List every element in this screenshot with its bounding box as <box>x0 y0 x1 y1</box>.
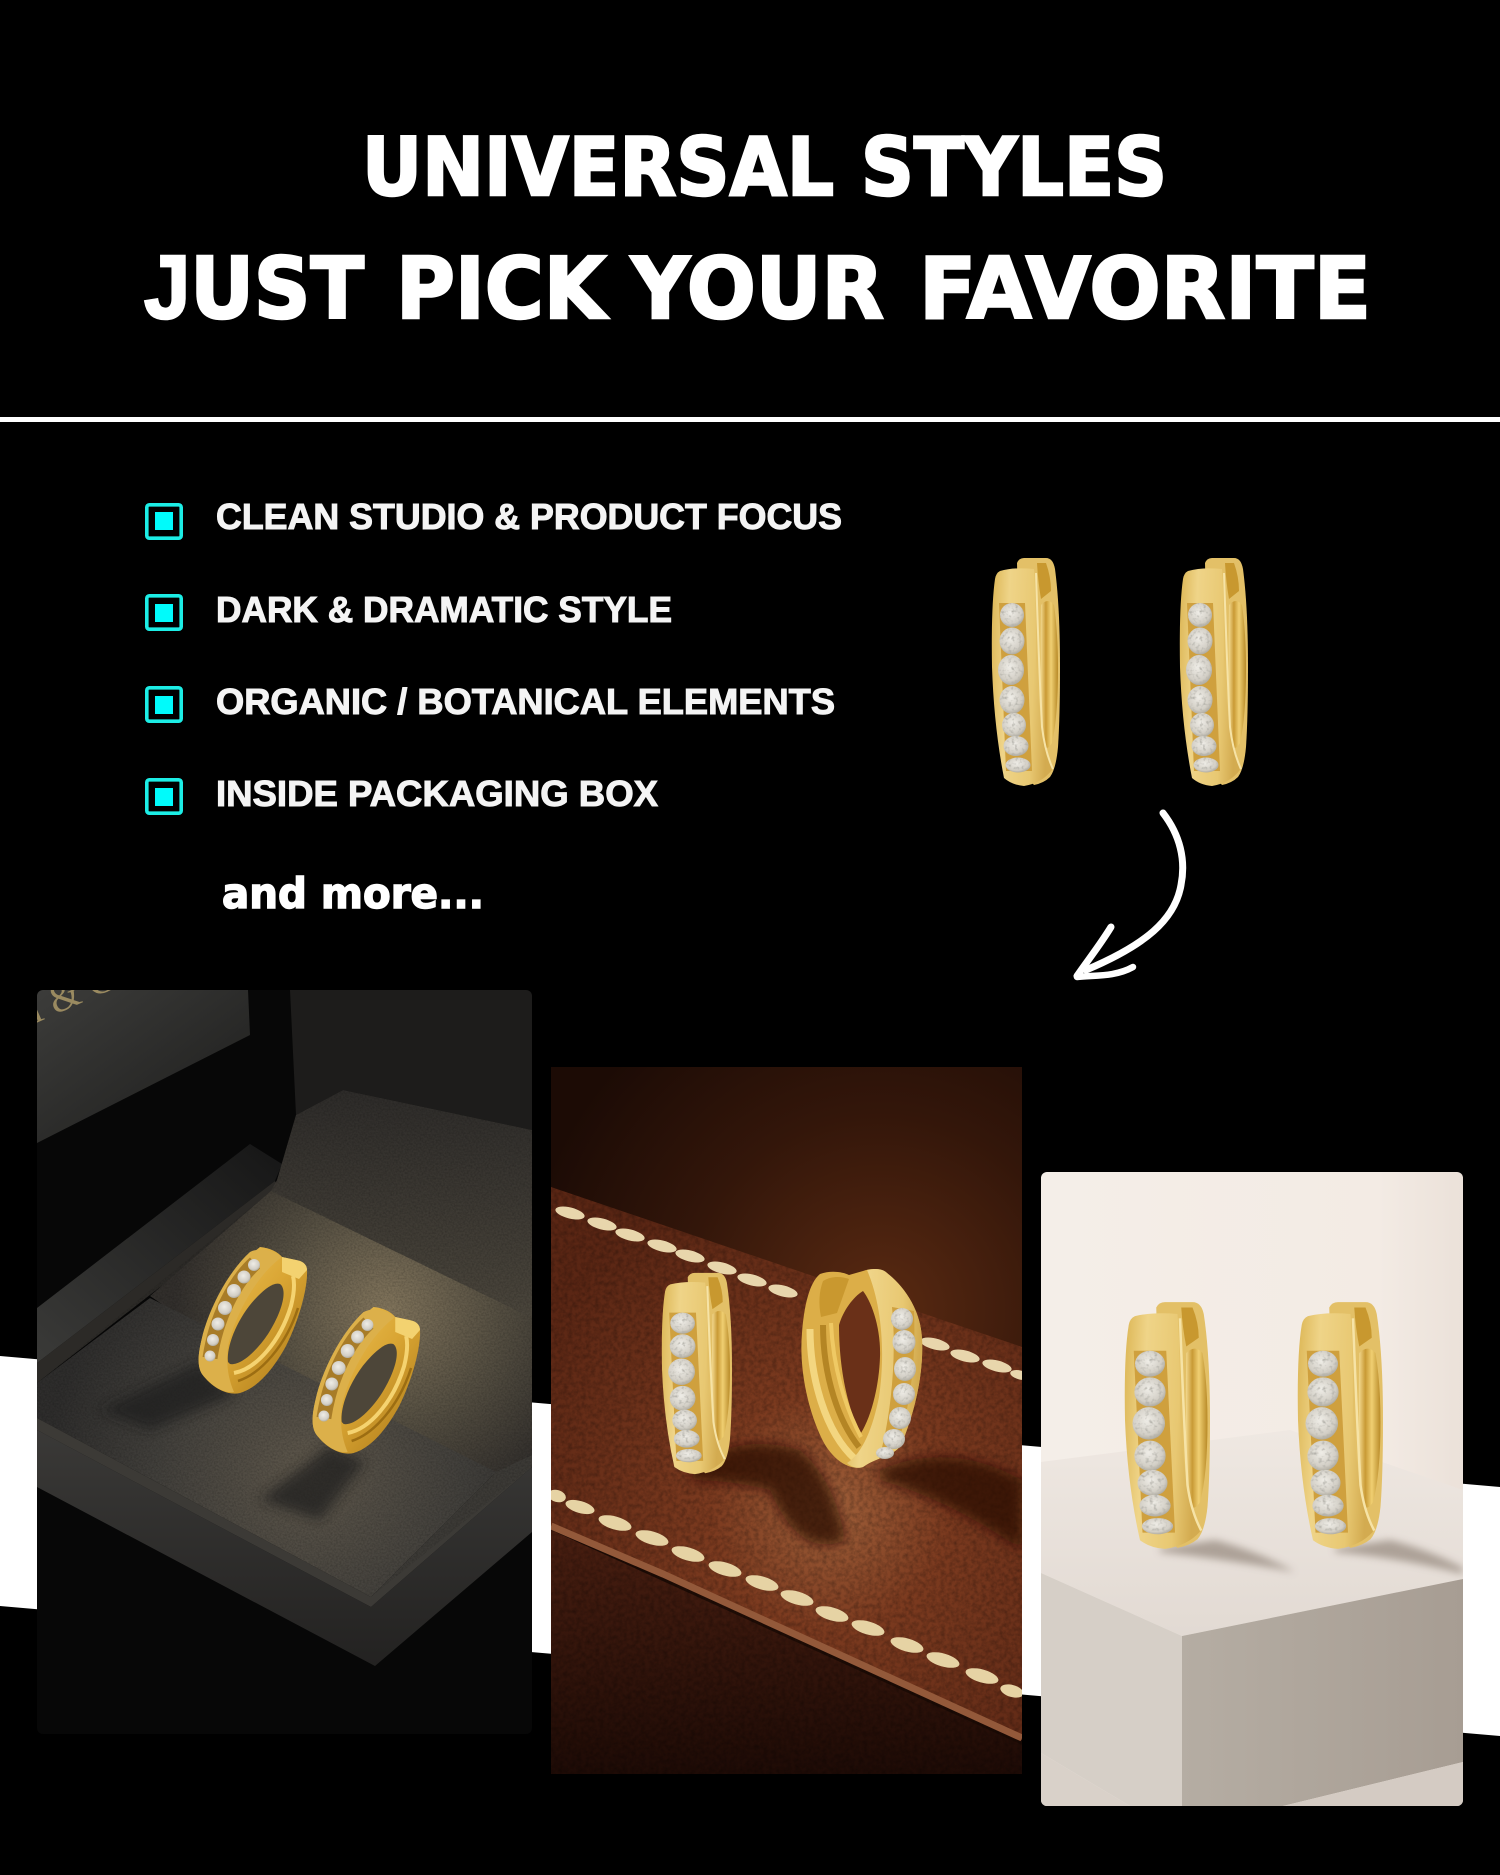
upper cushion <box>271 1090 532 1320</box>
rim lip <box>37 1181 282 1383</box>
title: UNIVERSAL <box>362 121 834 214</box>
title: FAVORITE <box>919 240 1371 339</box>
photo: inside packaging box <box>37 990 532 1666</box>
earrings on leather <box>662 1269 922 1474</box>
rear cushion roll <box>150 1191 532 1475</box>
list item: inside packaging box: INSIDE PACKAGING BOX <box>216 773 658 814</box>
list item: dark and dramatic: DARK & DRAMATIC STYLE <box>216 589 672 630</box>
upper stitches <box>554 1204 1031 1382</box>
leather top <box>551 1187 1022 1740</box>
title: YOUR <box>630 240 884 339</box>
white diagonal band behind photos <box>0 1356 1500 1736</box>
velvet grain <box>37 1090 532 1600</box>
feature list <box>147 496 842 918</box>
plinth left face <box>1041 1573 1182 1806</box>
list item: clean studio: CLEAN STUDIO & PRODUCT FOCUS <box>216 496 842 537</box>
front cushion roll <box>37 1298 496 1597</box>
photo: clean studio <box>1041 1172 1463 1806</box>
floor <box>1283 1762 1463 1806</box>
title: PICK <box>396 240 609 339</box>
list item: organic botanical: ORGANIC / BOTANICAL ELEMENTS <box>216 681 835 722</box>
title <box>144 121 1371 339</box>
box lid with gold lettering: I & Co <box>19 946 139 1032</box>
arrow <box>1077 813 1183 977</box>
product earrings pair <box>992 558 1248 786</box>
plinth top <box>1041 1461 1438 1636</box>
title: JUST <box>144 238 364 339</box>
and more text: and more... <box>222 869 484 918</box>
box lid with gold lettering <box>37 990 250 1143</box>
photo: leather surface <box>547 1067 1031 1774</box>
soft shadows <box>1160 1540 1463 1574</box>
front lacquer ledge <box>37 1430 532 1666</box>
fold highlight <box>551 1526 1022 1738</box>
earring shadows <box>100 1362 365 1520</box>
black rim <box>37 1144 282 1363</box>
earrings on plinth <box>1125 1302 1383 1549</box>
shadows <box>690 1444 1022 1550</box>
plinth right face <box>1182 1579 1463 1806</box>
lower stitches <box>547 1488 1025 1700</box>
divider line <box>0 417 1500 422</box>
leather lower fold <box>551 1530 1008 1740</box>
tilted earrings <box>199 1247 420 1454</box>
title: STYLES <box>861 121 1167 214</box>
back wall of box <box>290 990 532 1130</box>
cushion lip <box>37 1418 532 1607</box>
leather grain <box>551 1187 1022 1774</box>
